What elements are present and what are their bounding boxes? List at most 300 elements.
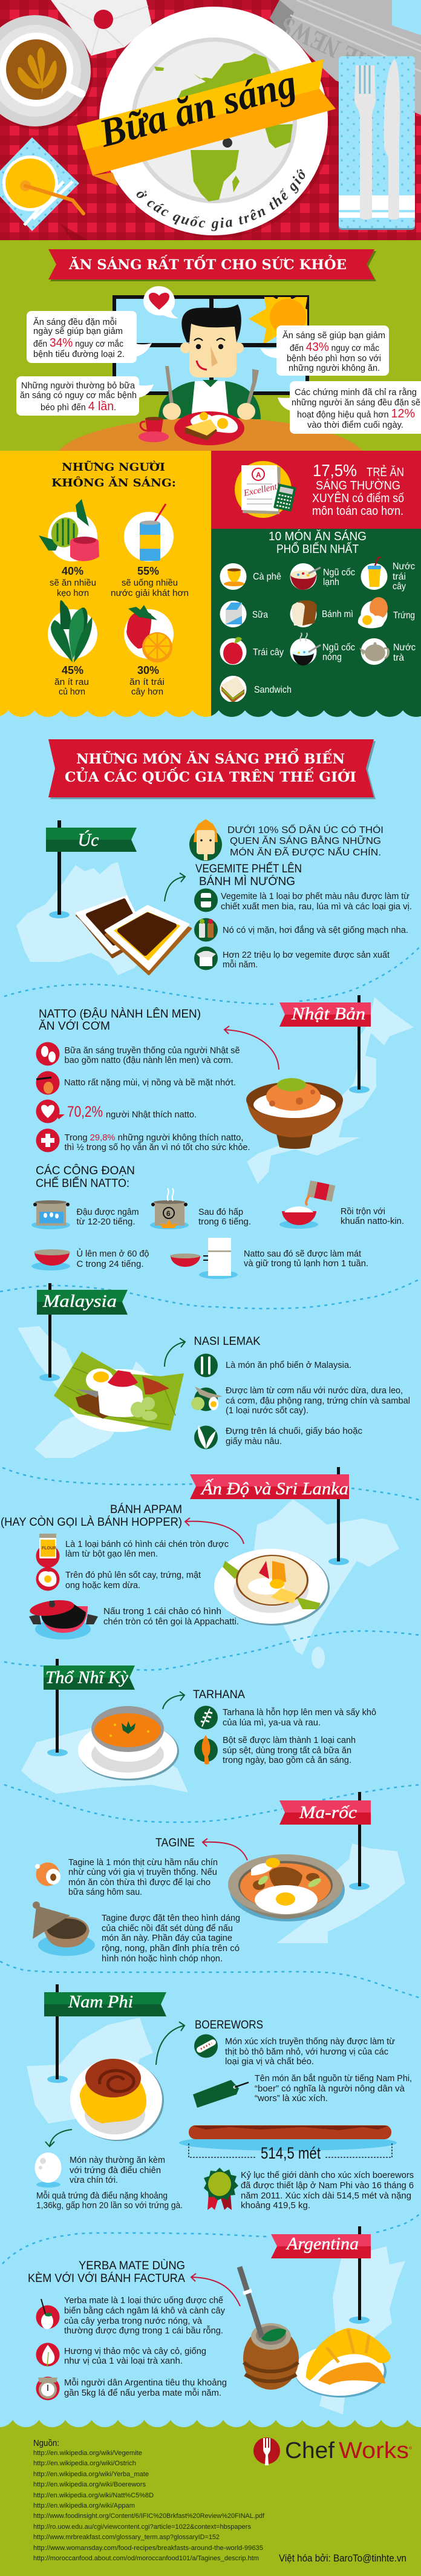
text: math scores bbox=[312, 461, 404, 518]
step: ferment bbox=[31, 1248, 149, 1270]
bullet: ingredients bbox=[191, 1386, 410, 1416]
text: math scores: SÁNG THƯỜNG bbox=[316, 479, 400, 492]
arrow bbox=[224, 1026, 279, 1070]
flag: Japan: Nhật Bản bbox=[291, 1005, 365, 1024]
flag: Turkey: Thổ Nhĩ Kỳ bbox=[45, 1669, 129, 1687]
tarhana soup bowl bbox=[78, 1706, 179, 1780]
sources list: http://moroccanfood.about.com/od/moroccanfood101/a/Tagines_descrip.htm bbox=[33, 2555, 259, 2562]
bullet: taste: như vị của 1 vài loại trà xanh. bbox=[64, 2356, 183, 2366]
callout: obesity risk: béo phì đến 4 lần. bbox=[41, 400, 116, 413]
callout: 43 percent: những người không ăn. bbox=[289, 364, 380, 373]
food: milk bbox=[220, 601, 268, 627]
newspaper bbox=[270, 0, 421, 115]
bullet: popular: Là món ăn phổ biến ở Malaysia. bbox=[226, 1361, 351, 1370]
icon: Australian man bbox=[189, 819, 222, 861]
flag: Australia bbox=[46, 820, 137, 918]
bullet: spoon: súp sệt, dùng trong tất cả bữa ăn bbox=[223, 1746, 351, 1756]
icon: appachatti pan: chén tròn có tên gọi là Appachatti. bbox=[103, 1617, 239, 1627]
food: tea bbox=[359, 638, 416, 665]
section: India and Sri Lanka bbox=[1, 1467, 349, 1639]
sources list: Nguồn: bbox=[33, 2438, 59, 2448]
panel: ten popular breakfast foods bbox=[211, 529, 421, 710]
stat: 55 percent soft drinks bbox=[111, 565, 189, 598]
icon: exam paper and calculator: Excellent! bbox=[243, 482, 281, 499]
bullet: taste: Nó có vị mặn, hơi đắng và sệt giống mạch nha. bbox=[223, 925, 408, 935]
flag: Morocco bbox=[279, 1792, 371, 1890]
icon: name tag: Tên món ăn bắt nguồn từ tiếng Nam Phi, bbox=[255, 2073, 412, 2084]
logo: Chef Works: ® bbox=[409, 2446, 413, 2451]
flag: Morocco: Ma-rốc bbox=[299, 1803, 357, 1822]
map: Turkey bbox=[21, 1724, 188, 1794]
map: Australia bbox=[16, 862, 157, 975]
background: world section bbox=[0, 705, 421, 2429]
bullet: what is yerba mate: Yerba mate là 1 loại thức uống được chế bbox=[64, 2296, 223, 2306]
mate gourd bbox=[240, 2267, 299, 2390]
section: Malaysia bbox=[37, 1283, 410, 1450]
bullet: wheat bbox=[194, 1706, 376, 1729]
heading ribbon: world breakfasts: CỦA CÁC QUỐC GIA TRÊN THẾ GIỚI bbox=[65, 767, 356, 785]
flag: India: Ấn Độ và Sri Lanka bbox=[200, 1479, 348, 1499]
icon: ostrich egg: vừa chín tới. bbox=[70, 2176, 118, 2185]
bullet: rice flour: làm từ bột gạo lên men. bbox=[65, 1549, 158, 1559]
heading: appam: (HAY CÒN GỌI LÀ BÁNH HOPPER) bbox=[1, 1515, 182, 1529]
bullet: spoon bbox=[194, 1735, 356, 1765]
step: refrigerate: Natto sau đó sẽ được làm mát bbox=[244, 1249, 361, 1259]
bullet: 29.8 percent bbox=[36, 1129, 250, 1152]
bullet: sausage: Món xúc xích truyền thống này được làm từ bbox=[225, 2037, 395, 2047]
heading: nasi lemak: NASI LEMAK bbox=[194, 1335, 261, 1348]
step: ferment: C trong 24 tiếng. bbox=[76, 1260, 144, 1269]
icon: exam paper and calculator bbox=[235, 461, 296, 518]
callout: 12 percent: Các chứng minh đã chỉ ra rằng bbox=[295, 387, 417, 397]
subtitle on plate rim bbox=[137, 169, 305, 231]
tagine dish bbox=[228, 1854, 345, 1921]
heading ribbon bbox=[48, 249, 376, 281]
map: India and Sri Lanka bbox=[254, 1499, 399, 1655]
icon: name tag bbox=[193, 2073, 412, 2108]
sources list: http://www.mrbreakfast.com/glossary_term.asp?glossaryID=152 bbox=[33, 2534, 220, 2541]
step: soak beans: Đậu được ngâm bbox=[76, 1208, 139, 1217]
arrow bbox=[191, 2274, 240, 2306]
food: hot cereal: nóng bbox=[322, 652, 342, 662]
callout: diabetes: Ăn sáng đều đặn mỗi bbox=[33, 317, 117, 327]
icon: candy bbox=[39, 499, 99, 561]
napkin and cutlery bbox=[339, 56, 415, 230]
bullet: what is yerba mate: thường được đựng trong 1 cái bầu rỗng. bbox=[64, 2326, 223, 2336]
icon: spinach bbox=[48, 600, 97, 662]
boerewors plate bbox=[70, 2059, 164, 2141]
map: Argentina bbox=[319, 2246, 405, 2414]
callout: 12 percent: vào thời điểm cuối ngày. bbox=[307, 420, 403, 430]
food: fruit juice: cây bbox=[393, 581, 406, 592]
heading ribbon: world breakfasts bbox=[48, 739, 376, 799]
section: South Africa bbox=[35, 1984, 414, 2211]
stat: 45 percent vegetables: ăn ít rau bbox=[54, 678, 89, 687]
icon: ostrich egg bbox=[35, 2153, 165, 2188]
title ribbon bbox=[77, 59, 336, 186]
bullet: ingredients: Được làm từ cơm nấu với nước dừa, dưa leo, bbox=[226, 1386, 403, 1396]
icon: record medal bbox=[204, 2168, 414, 2211]
sources list: http://en.wikipedia.org/wiki/Boerewors bbox=[33, 2481, 146, 2488]
maps bbox=[16, 862, 414, 2414]
callout: obesity risk: Những người thường bỏ bữa bbox=[21, 381, 135, 391]
sources list: http://www.foodinsight.org/Content/6/IFIC%20Brkfast%20Review%20FINAL.pdf bbox=[33, 2512, 265, 2520]
food: sandwich bbox=[220, 676, 292, 703]
icon: record medal: đã được thiết lập ở Nam Phi vào 16 tháng 6 bbox=[241, 2181, 414, 2191]
bullet: taste bbox=[194, 918, 408, 941]
plate bbox=[99, 7, 331, 238]
icon: name tag: “boer” có nghĩa là người nông dân và bbox=[255, 2084, 405, 2094]
dotted route bbox=[0, 946, 421, 2264]
stat: 40 percent candy bbox=[50, 565, 96, 598]
heading: tagine: TAGINE bbox=[155, 1837, 195, 1849]
bullet: sausage bbox=[194, 2034, 395, 2067]
step: steam: Sau đó hấp bbox=[198, 1208, 243, 1217]
callout: 43 percent bbox=[260, 325, 389, 376]
stat: 55 percent soft drinks: nước giải khát hơn bbox=[111, 589, 189, 598]
step: steam: 6 bbox=[166, 1209, 171, 1218]
step: mix with natto-kin: khuẩn natto-kin. bbox=[341, 1217, 404, 1226]
stat: 40 percent candy: sẽ ăn nhiều bbox=[50, 578, 96, 588]
arrow bbox=[203, 1839, 247, 1860]
step: steam bbox=[150, 1188, 251, 1229]
bullet: smell: Natto rất nặng mùi, vị nồng và bề mặt nhớt. bbox=[64, 1078, 236, 1088]
text: math scores: TRẺ ĂN bbox=[367, 465, 404, 479]
food: cold cereal bbox=[290, 563, 355, 590]
sources list: http://en.wikipedia.org/wiki/Ostrich bbox=[33, 2460, 136, 2467]
food: coffee: Cà phê bbox=[253, 572, 281, 582]
flag: Japan bbox=[279, 995, 371, 1093]
heading bbox=[51, 460, 176, 489]
newspaper: THE NEWS bbox=[276, 11, 390, 85]
title text: Bữa ăn sáng bbox=[94, 61, 301, 156]
heading: KHÔNG ĂN SÁNG: bbox=[51, 476, 176, 489]
stat: 40 percent candy: 40% bbox=[62, 565, 83, 577]
callout: 12 percent bbox=[278, 381, 421, 434]
flag: Argentina: Argentina bbox=[286, 2235, 359, 2254]
bullet: rice flour bbox=[36, 1534, 229, 1568]
logo: Chef Works: Works bbox=[339, 2438, 409, 2463]
icon: appachatti pan bbox=[29, 1598, 239, 1639]
bullet: consumption: Mỗi người dân Argentina tiêu thụ khoảng bbox=[64, 2378, 227, 2388]
bullet: toppings: Trên đó phủ lên sốt cay, trứng, mật bbox=[65, 1571, 201, 1580]
step: soak beans bbox=[31, 1200, 139, 1229]
bullet: spoon: trong ngày, bao gồm cả ăn sáng. bbox=[223, 1756, 351, 1765]
callout: 12 percent: những người ăn sáng đều đặn sẽ bbox=[292, 398, 420, 408]
arrow bbox=[165, 1338, 185, 1367]
arrow bbox=[165, 873, 185, 901]
bullet: lamb: Tagine là 1 món thịt cừu hầm nấu chín bbox=[68, 1858, 218, 1868]
stat: 55 percent soft drinks: sẽ uống nhiều bbox=[122, 578, 178, 588]
logo: Chef Works bbox=[253, 2437, 413, 2465]
bullet: 29.8 percent: thì ½ trong số họ vẫn ăn vì nó tốt cho sức khỏe. bbox=[64, 1142, 250, 1152]
bullet: taste: Hương vị thảo mộc và cây cỏ, giống bbox=[64, 2347, 206, 2356]
icon: clay tagine pot: rộng, nong, phần đỉnh phía trên có bbox=[102, 1944, 240, 1953]
bullet: production bbox=[194, 946, 390, 970]
heading: yerba mate: KÈM VỚI VỚI BÁNH FACTURA bbox=[28, 2272, 185, 2285]
bullet: vegemite: Vegemite là 1 loại bơ phết màu nâu được làm từ bbox=[221, 892, 410, 901]
food: eggs bbox=[358, 597, 415, 628]
arrow bbox=[156, 2022, 184, 2065]
food: hot cereal bbox=[290, 633, 355, 665]
panel: people who skip breakfast bbox=[0, 451, 211, 710]
callout: obesity risk bbox=[16, 376, 154, 416]
bullet: ingredients: (1 loại nước sốt cay). bbox=[226, 1406, 308, 1416]
icon: record medal: khoảng 419,5 kg. bbox=[241, 2201, 310, 2211]
heading: natto process: CÁC CÔNG ĐOẠN bbox=[36, 1164, 135, 1177]
arrow bbox=[185, 1518, 244, 1544]
bullet: wheat: Tarhana là hỗn hợp lên men và sấy khô bbox=[223, 1707, 376, 1718]
window with sun bbox=[113, 295, 309, 395]
section: Argentina bbox=[28, 2226, 391, 2401]
callout: 43 percent: Ăn sáng sẽ giúp bạn giảm bbox=[282, 330, 385, 341]
section: Japan bbox=[31, 995, 404, 1279]
sources list: http://www.womansday.com/food-recipes/breakfasts-around-the-world-99635 bbox=[33, 2545, 263, 2552]
heading ribbon: world breakfasts: NHỮNG MÓN ĂN SÁNG PHỔ BIẾN bbox=[76, 748, 345, 767]
bullet: 70.2 percent: 70,2% bbox=[67, 1103, 103, 1120]
heading: NHỮNG NGƯỜI bbox=[62, 460, 165, 474]
stat: 45 percent vegetables: củ hơn bbox=[59, 687, 85, 697]
heading: vegemite: BÁNH MÌ NƯỚNG bbox=[199, 875, 295, 888]
food: bread: Bánh mì bbox=[322, 609, 353, 619]
food: eggs: Trứng bbox=[393, 610, 415, 621]
credit: Việt hóa bởi: BaroTo@tinhte.vn bbox=[279, 2552, 406, 2564]
long sausage with length: 514,5 mét bbox=[261, 2144, 321, 2162]
icon: record medal: năm 2011. Xúc xích dài 514,5 mét và nặng bbox=[241, 2191, 411, 2201]
bullet: banana leaf: Đựng trên lá chuối, giấy báo hoặc bbox=[226, 1427, 362, 1436]
icon: appachatti pan: Nấu trong 1 cái chảo có hình bbox=[103, 1607, 221, 1617]
flag: Australia: Úc bbox=[78, 830, 99, 850]
logo: Chef Works: Chef bbox=[285, 2438, 335, 2463]
natto rice bowl bbox=[246, 1078, 343, 1149]
bullet: 70.2 percent: người Nhật thích natto. bbox=[106, 1110, 197, 1120]
bullet: rice flour: Là 1 loại bánh có hình cái chén tròn được bbox=[65, 1540, 229, 1549]
icon: clay tagine pot: hình nón hoặc hình chóp nhọn. bbox=[102, 1954, 223, 1964]
nasi lemak bbox=[54, 1352, 184, 1432]
bullet: what is yerba mate bbox=[36, 2296, 226, 2336]
bullet: traditional: bao gồm natto (đậu nành lên men) và cơm. bbox=[64, 1056, 233, 1065]
step: ferment: Ủ lên men ở 60 độ bbox=[76, 1248, 149, 1259]
food: hot cereal: Ngũ cốc bbox=[322, 642, 355, 653]
flag: India bbox=[190, 1467, 349, 1565]
vegemite toast bbox=[77, 897, 191, 974]
heading: tarhana: TARHANA bbox=[193, 1688, 245, 1701]
bullet: 70.2 percent bbox=[36, 1100, 197, 1123]
bullet: lamb: món ăn còn thừa thì được để lại cho bbox=[68, 1878, 211, 1888]
stat: 30 percent fruit: ăn ít trái bbox=[129, 678, 165, 687]
bullet: traditional bbox=[36, 1042, 240, 1066]
bullet: toppings bbox=[36, 1567, 201, 1591]
heading bbox=[269, 529, 367, 556]
sources list bbox=[33, 2438, 265, 2562]
bullet: ingredients: cá cơm, đậu phộng rang, trứng chín và sambal bbox=[226, 1396, 410, 1406]
text: ostrich egg weight: 1,36kg, gấp hơn 20 lần so với trứng gà. bbox=[36, 2201, 183, 2211]
sources list: http://en.wikipedia.org/wiki/Natt%C5%8D bbox=[33, 2492, 154, 2499]
text: math scores: môn toán cao hơn. bbox=[312, 505, 403, 518]
stat: 55 percent soft drinks: 55% bbox=[137, 565, 159, 577]
heading: natto: NATTO (ĐẬU NÀNH LÊN MEN) bbox=[39, 1007, 201, 1021]
section: Turkey bbox=[44, 1659, 376, 1780]
bullet: wheat: của lúa mì, ya-ua và rau. bbox=[223, 1718, 321, 1728]
arrow bbox=[45, 2130, 72, 2146]
heading: natto process bbox=[36, 1164, 135, 1190]
stat: 45 percent vegetables: 45% bbox=[62, 664, 83, 676]
callout: diabetes: đến 34% nguy cơ mắc bbox=[33, 336, 123, 350]
heading: appam: BÁNH APPAM bbox=[110, 1503, 182, 1516]
food: fruit juice: trái bbox=[393, 572, 406, 582]
bullet: spoon: Bột sẽ được làm thành 1 loại canh bbox=[223, 1736, 356, 1745]
step: refrigerate: và giữ trong tủ lạnh hơn 1 tuần. bbox=[244, 1259, 368, 1269]
coffee cup bbox=[0, 15, 93, 129]
heading: 10 MÓN ĂN SÁNG bbox=[269, 529, 367, 543]
step: steam: trong 6 tiếng. bbox=[198, 1217, 251, 1227]
flag: South Africa bbox=[44, 1984, 166, 2083]
icon: clay tagine pot bbox=[33, 1901, 240, 1964]
heading: appam bbox=[1, 1503, 182, 1529]
stat: 30 percent fruit: cây hơn bbox=[131, 687, 163, 697]
panel: math scores bbox=[211, 451, 421, 529]
bullet: taste bbox=[36, 2342, 206, 2367]
icon: exam paper and calculator: A bbox=[256, 471, 261, 479]
callout: 12 percent: hoạt động hiệu quả hơn 12% bbox=[297, 407, 415, 420]
sources list: http://en.wikipedia.org/wiki/Vegemite bbox=[33, 2450, 142, 2457]
stat: 45 percent vegetables bbox=[54, 664, 89, 697]
man eating breakfast bbox=[59, 304, 362, 451]
bullet: consumption: gần 5kg lá để nấu yerba mate mỗi năm. bbox=[64, 2388, 221, 2398]
orange juice on napkin bbox=[0, 137, 91, 242]
heading: yerba mate: YERBA MATE DÙNG bbox=[79, 2259, 185, 2272]
map: Morocco bbox=[276, 1843, 405, 1943]
map: Japan bbox=[247, 997, 414, 1184]
bullet: vegemite bbox=[194, 888, 412, 912]
food: cold cereal: lạnh bbox=[323, 577, 339, 587]
callout: diabetes: ngày sẽ giúp bạn giảm bbox=[33, 327, 123, 336]
heading: PHỔ BIẾN NHẤT bbox=[276, 541, 359, 556]
stat: 30 percent fruit: 30% bbox=[137, 664, 159, 676]
step: refrigerate bbox=[170, 1238, 368, 1279]
callout: 43 percent: đến 43% nguy cơ mắc bbox=[290, 341, 379, 354]
bullet: lamb bbox=[35, 1858, 218, 1897]
croissants on plate bbox=[295, 2328, 391, 2398]
map: South Africa bbox=[27, 2018, 153, 2123]
callout: obesity risk: ăn sáng có nguy cơ mắc bệnh bbox=[20, 390, 137, 400]
icon: clay tagine pot: Tagine được đặt tên theo hình dáng bbox=[102, 1914, 240, 1923]
food: fruit: Trái cây bbox=[253, 647, 284, 658]
food: fruit bbox=[220, 637, 284, 665]
step: mix with natto-kin: Rồi trộn với bbox=[341, 1207, 385, 1217]
icon: ostrich egg: với trứng đà điểu chiên bbox=[70, 2166, 161, 2176]
text: ostrich egg weight: Mỗi quả trứng đà điểu nặng khoảng bbox=[36, 2191, 168, 2201]
text: under 10 percent: MÓN ĂN ĐÃ ĐƯỢC NẤU CHÍN. bbox=[230, 846, 381, 858]
text: math scores: 17,5% bbox=[313, 461, 357, 480]
text: under 10 percent: QUEN ĂN SÁNG BẰNG NHỮNG bbox=[230, 834, 381, 846]
bullet: banana leaf bbox=[194, 1425, 362, 1450]
heading: natto process: CHẾ BIẾN NATTO: bbox=[36, 1177, 129, 1190]
icon: clay tagine pot: của chiếc nồi đất sét dùng để nấu bbox=[102, 1924, 233, 1934]
bullet: traditional: Bữa ăn sáng truyền thống của người Nhật sẽ bbox=[64, 1046, 240, 1056]
food: bread bbox=[290, 600, 353, 627]
heading: vegemite: VEGEMITE PHẾT LÊN bbox=[195, 862, 302, 875]
sources list: http://en.wikipedia.org/wiki/Yerba_mate bbox=[33, 2471, 149, 2478]
globe continents bbox=[154, 53, 293, 201]
stat: 30 percent fruit bbox=[129, 664, 165, 697]
flag: Turkey bbox=[44, 1659, 135, 1756]
food: fruit juice: Nước bbox=[393, 561, 415, 572]
icon: clay tagine pot: món ăn này. Phần đáy của tagine bbox=[102, 1934, 232, 1943]
section: Australia bbox=[46, 819, 412, 974]
icon: name tag: “wors” là xúc xích. bbox=[255, 2094, 328, 2104]
text: under 10 percent bbox=[227, 823, 383, 858]
stat: 40 percent candy: kẹo hơn bbox=[57, 589, 89, 598]
step: soak beans: từ 12-20 tiếng. bbox=[76, 1217, 135, 1227]
food: cold cereal: Ngũ cốc bbox=[323, 567, 355, 578]
bullet: production: Hơn 22 triệu lọ bơ vegemite được sản xuất bbox=[223, 950, 390, 960]
bullet: what is yerba mate: biến bằng cách ngâm lá khô và cành cây bbox=[64, 2306, 226, 2316]
food: tea: trà bbox=[393, 653, 404, 663]
bullet: what is yerba mate: của cây yerba trong nước nóng, và bbox=[64, 2316, 203, 2326]
heading: natto: ĂN VỚI CƠM bbox=[39, 1019, 110, 1033]
sources list: http://ro.uow.edu.au/cgi/viewcontent.cgi?article=1022&context=hbspapers bbox=[33, 2523, 251, 2531]
icon: soda can bbox=[124, 504, 174, 561]
flag: Malaysia bbox=[37, 1283, 128, 1381]
fork bbox=[354, 65, 376, 220]
sources list: http://en.wikipedia.org/wiki/Appam bbox=[33, 2502, 135, 2509]
footer bbox=[0, 2420, 421, 2576]
icon: ostrich egg: Món này thường ăn kèm bbox=[70, 2156, 165, 2165]
heading ribbon: ĂN SÁNG RẤT TỐT CHO SỨC KHỎE bbox=[68, 255, 347, 273]
heading: vegemite bbox=[195, 862, 302, 888]
callout: diabetes bbox=[27, 311, 152, 363]
arrow bbox=[163, 1692, 184, 1709]
flag: Malaysia: Malaysia bbox=[42, 1292, 117, 1311]
bullet: popular bbox=[194, 1354, 351, 1377]
bullet: banana leaf: giấy màu nâu. bbox=[226, 1437, 282, 1447]
food: sandwich: Sandwich bbox=[254, 685, 292, 695]
food: tea: Nước bbox=[393, 642, 416, 653]
bullet: consumption bbox=[36, 2376, 227, 2401]
icon: record medal: Kỷ lục thế giới dành cho xúc xích boerewors bbox=[241, 2171, 414, 2180]
step: mix with natto-kin bbox=[279, 1180, 404, 1229]
bullet: lamb: nhừ cùng với gia vị truyền thống. Nếu bbox=[68, 1868, 217, 1877]
flag: South Africa: Nam Phi bbox=[68, 1993, 133, 2012]
text: ostrich egg weight bbox=[36, 2191, 183, 2211]
bullet: vegemite: chiết xuất men bia, rau, lúa mì và các loại gia vị. bbox=[221, 902, 412, 912]
bullet: lamb: bữa sáng hôm sau. bbox=[68, 1888, 142, 1897]
knife bbox=[384, 59, 400, 220]
header: breakfast table bbox=[0, 0, 421, 240]
icon: strawberry and orange bbox=[124, 605, 174, 662]
heading: yerba mate bbox=[28, 2259, 185, 2285]
flag: Argentina bbox=[271, 2226, 371, 2324]
food: fruit juice bbox=[361, 557, 415, 592]
bullet: smell bbox=[36, 1071, 236, 1095]
bullet: sausage: loại gia vị và chất béo. bbox=[225, 2057, 314, 2067]
long sausage with length bbox=[179, 2125, 397, 2162]
heart bubble bbox=[143, 286, 178, 318]
heading: natto bbox=[39, 1007, 201, 1033]
bullet: sausage: thịt bò thô băm nhỏ, với hương vị của các bbox=[225, 2047, 388, 2057]
bullet: 29.8 percent: Trong 29,8% những người không thích natto, bbox=[64, 1133, 243, 1143]
callout: diabetes: bệnh tiểu đường loại 2. bbox=[33, 350, 125, 359]
section: Morocco bbox=[33, 1792, 371, 1964]
scalloped edge bbox=[0, 702, 421, 717]
food: coffee bbox=[220, 563, 281, 590]
map: Malaysia bbox=[18, 1326, 145, 1458]
callout: 43 percent: bệnh béo phì hơn so với bbox=[287, 354, 381, 364]
bullet: production: mỗi năm. bbox=[223, 959, 258, 970]
bullet: rice flour: FLOUR bbox=[42, 1546, 56, 1551]
heading: boerewors: BOEREWORS bbox=[195, 2019, 263, 2032]
